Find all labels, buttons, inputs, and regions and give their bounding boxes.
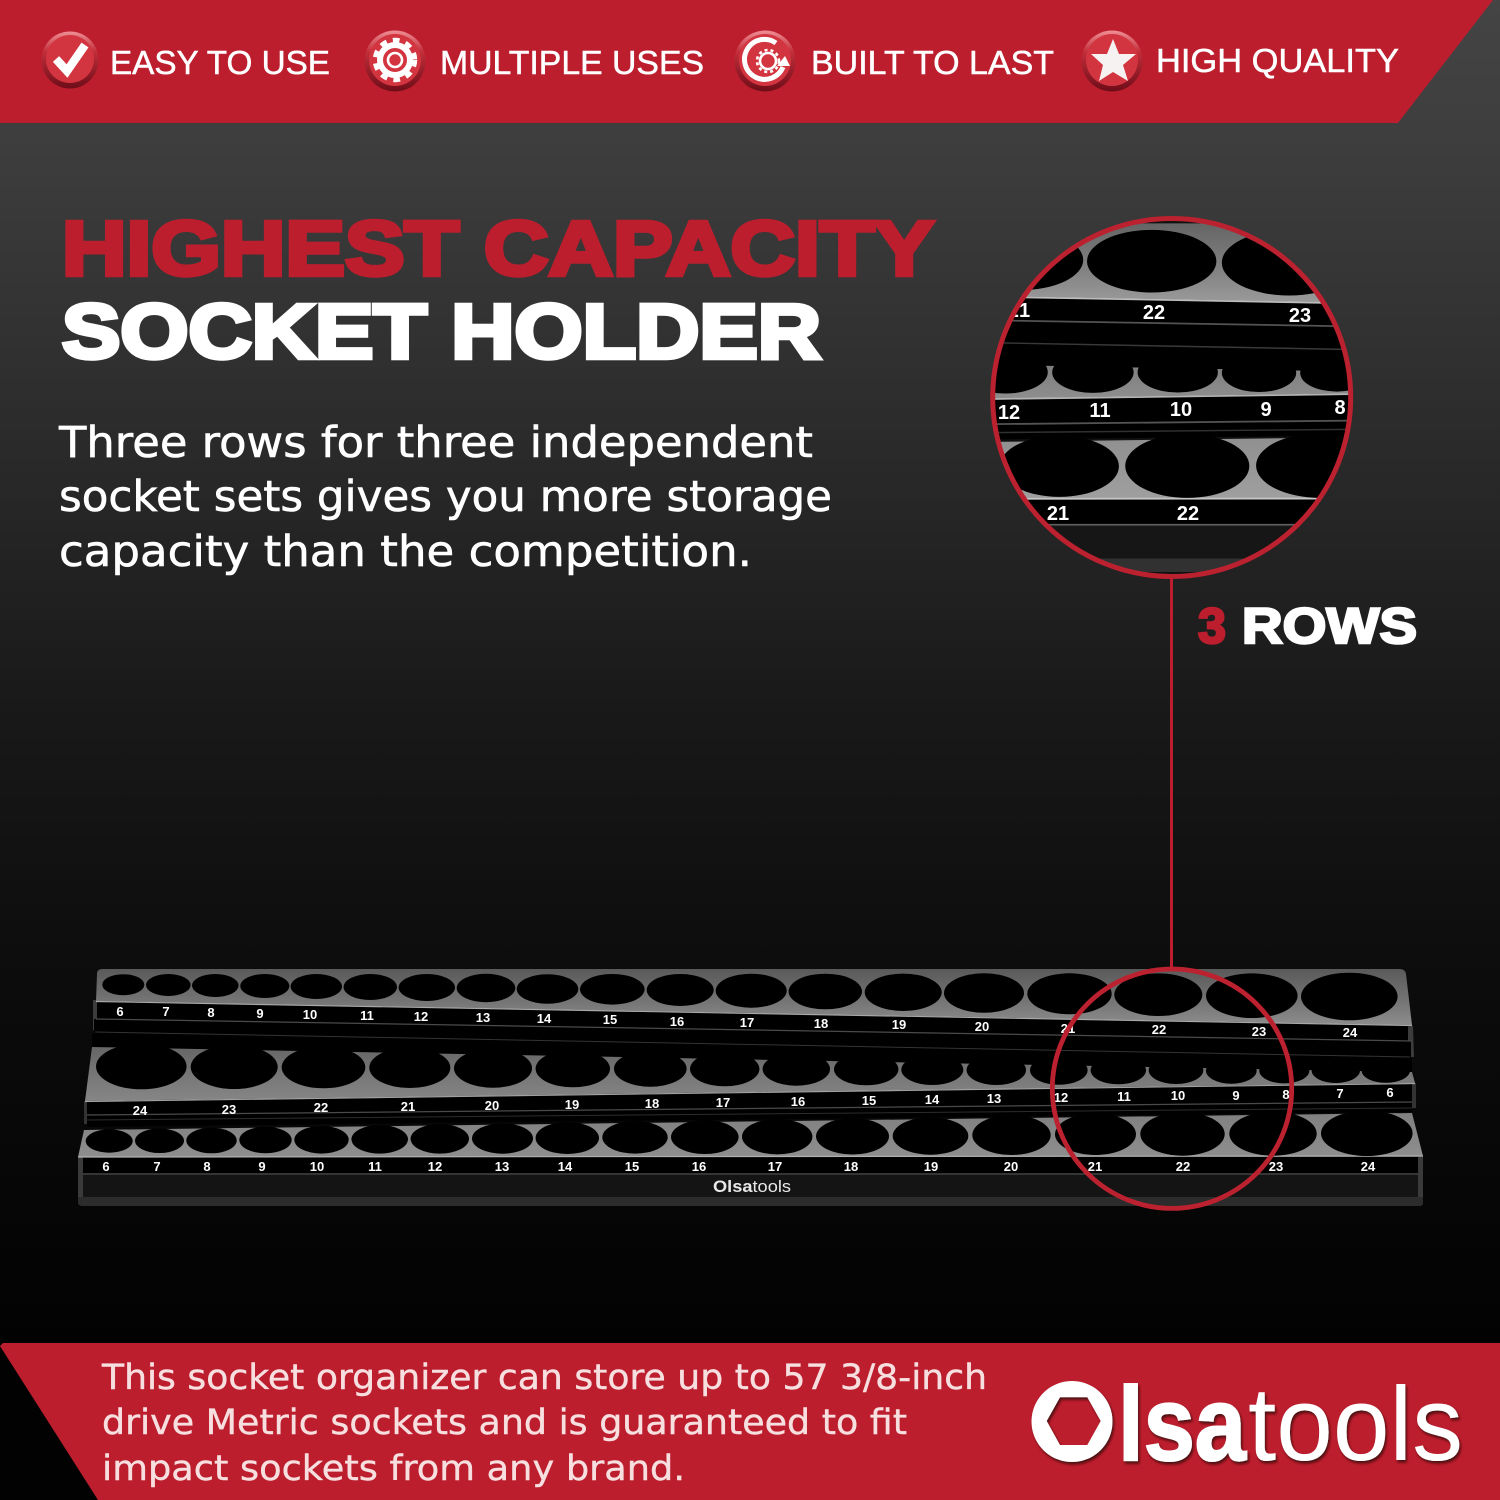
tray number labels: 8 (203, 1159, 211, 1174)
socket holder tray (78, 969, 1423, 1206)
magnified tray view (995, 223, 1348, 572)
tray number labels: 22 (1152, 1022, 1166, 1037)
tray number labels: 11 (360, 1008, 374, 1023)
tray number labels: 7 (153, 1159, 161, 1174)
tray number labels: 7 (162, 1004, 170, 1019)
tray number labels: 10 (310, 1159, 324, 1174)
label: built to last: BUILT TO LAST (811, 44, 1054, 81)
tray number labels: 10 (1171, 1088, 1185, 1103)
icon: gear badge (364, 30, 426, 92)
magnified tray view: 11 (1089, 400, 1111, 422)
banner text: drive Metric sockets and is guaranteed to fit (102, 1403, 907, 1443)
tray number labels: 14 (537, 1011, 552, 1026)
header banner (0, 0, 1493, 123)
tray number labels: 8 (1282, 1087, 1290, 1102)
tray number labels: 13 (476, 1010, 490, 1025)
tray number labels: 11 (1117, 1089, 1131, 1104)
3 rows label: ROWS (1242, 598, 1417, 654)
tray number labels: 9 (258, 1159, 266, 1174)
tray number labels: 24 (1343, 1025, 1358, 1040)
tray number labels: 23 (1269, 1159, 1283, 1174)
banner text: This socket organizer can store up to 57 3/8-inch (101, 1358, 987, 1398)
tray number labels: 17 (740, 1015, 754, 1030)
magnified tray view: 23 (1289, 305, 1311, 327)
tray number labels: 18 (844, 1159, 858, 1174)
title: SOCKET HOLDER (62, 289, 821, 375)
description text: capacity than the competition. (59, 527, 752, 577)
tray row C (bottom) (78, 1111, 1423, 1206)
tray number labels: 20 (975, 1019, 989, 1034)
label: multiple uses: MULTIPLE USES (440, 44, 704, 81)
tray number labels: 20 (1004, 1159, 1018, 1174)
tray number labels: 15 (625, 1159, 639, 1174)
icon: check mark badge (42, 32, 98, 88)
tray number labels: 6 (1386, 1085, 1394, 1100)
logo: Olsatools: lsa (1118, 1366, 1247, 1483)
logo: Olsatools: tools (1248, 1366, 1463, 1483)
tray number labels: 17 (716, 1095, 730, 1110)
highlight ring on tray (1052, 969, 1292, 1208)
tray number labels (102, 1004, 1394, 1174)
tray number labels: 19 (565, 1097, 579, 1112)
magnifier callout (990, 216, 1354, 579)
tray number labels: 21 (1088, 1159, 1102, 1174)
magnified tray view: 9 (1260, 399, 1272, 421)
tray number labels: 19 (924, 1159, 938, 1174)
tray number labels: 14 (925, 1092, 940, 1107)
magnified tray view: 22 (1177, 503, 1199, 525)
title (62, 206, 934, 375)
description text (58, 418, 832, 577)
label: high quality: HIGH QUALITY (1156, 42, 1399, 79)
tray number labels: 11 (368, 1159, 382, 1174)
tray number labels: 9 (1232, 1088, 1240, 1103)
tray number labels: 12 (414, 1009, 428, 1024)
tray number labels: 24 (133, 1103, 148, 1118)
tray number labels: 15 (862, 1093, 876, 1108)
magnified tray view: 12 (998, 402, 1020, 424)
tray number labels: 16 (670, 1014, 684, 1029)
description text: socket sets gives you more storage (59, 472, 832, 522)
callout connector line (1170, 578, 1173, 968)
tray number labels: 23 (1252, 1024, 1266, 1039)
tray number labels: 21 (1061, 1021, 1075, 1036)
tray number labels: 22 (1176, 1159, 1190, 1174)
magnified tray view: 10 (1170, 399, 1192, 421)
icon: gear and cycle arrow badge (734, 30, 796, 92)
tray number labels: 14 (558, 1159, 573, 1174)
description text: Three rows for three independent (58, 418, 813, 468)
title: HIGHEST CAPACITY (62, 206, 934, 292)
tray number labels: 18 (645, 1096, 659, 1111)
magnified tray view: 22 (1143, 302, 1165, 324)
tray number labels: 8 (207, 1005, 215, 1020)
3 rows label: 3 (1198, 598, 1226, 654)
bottom banner (0, 1343, 1500, 1500)
tray brand mark: Olsatools (713, 1178, 791, 1196)
tray number labels: 13 (495, 1159, 509, 1174)
tray number labels: 20 (485, 1098, 499, 1113)
tray number labels: 16 (791, 1094, 805, 1109)
tray number labels: 6 (116, 1004, 124, 1019)
magnified tray view: 8 (1334, 397, 1346, 419)
tray number labels: 23 (222, 1102, 236, 1117)
tray number labels: 12 (1054, 1090, 1068, 1105)
tray number labels: 7 (1336, 1086, 1344, 1101)
logo: Olsatools (1032, 1366, 1463, 1483)
tray number labels: 6 (102, 1159, 110, 1174)
banner text (101, 1358, 987, 1489)
tray number labels: 17 (768, 1159, 782, 1174)
tray number labels: 16 (692, 1159, 706, 1174)
tray row B (middle) (84, 1034, 1416, 1127)
tray number labels: 9 (256, 1006, 264, 1021)
banner text: impact sockets from any brand. (102, 1449, 685, 1489)
tray number labels: 19 (892, 1017, 906, 1032)
icon: star badge (1082, 30, 1142, 92)
magnified tray view: 21 (1047, 503, 1069, 525)
tray row A (top) (93, 969, 1414, 1058)
tray number labels: 21 (401, 1099, 415, 1114)
label: easy to use: EASY TO USE (110, 44, 330, 81)
tray number labels: 22 (314, 1100, 328, 1115)
tray number labels: 24 (1361, 1159, 1376, 1174)
tray number labels: 10 (303, 1007, 317, 1022)
magnified tray view: 21 (1008, 300, 1030, 322)
tray number labels: 13 (987, 1091, 1001, 1106)
tray number labels: 12 (428, 1159, 442, 1174)
tray number labels: 15 (603, 1012, 617, 1027)
tray number labels: 18 (814, 1016, 828, 1031)
